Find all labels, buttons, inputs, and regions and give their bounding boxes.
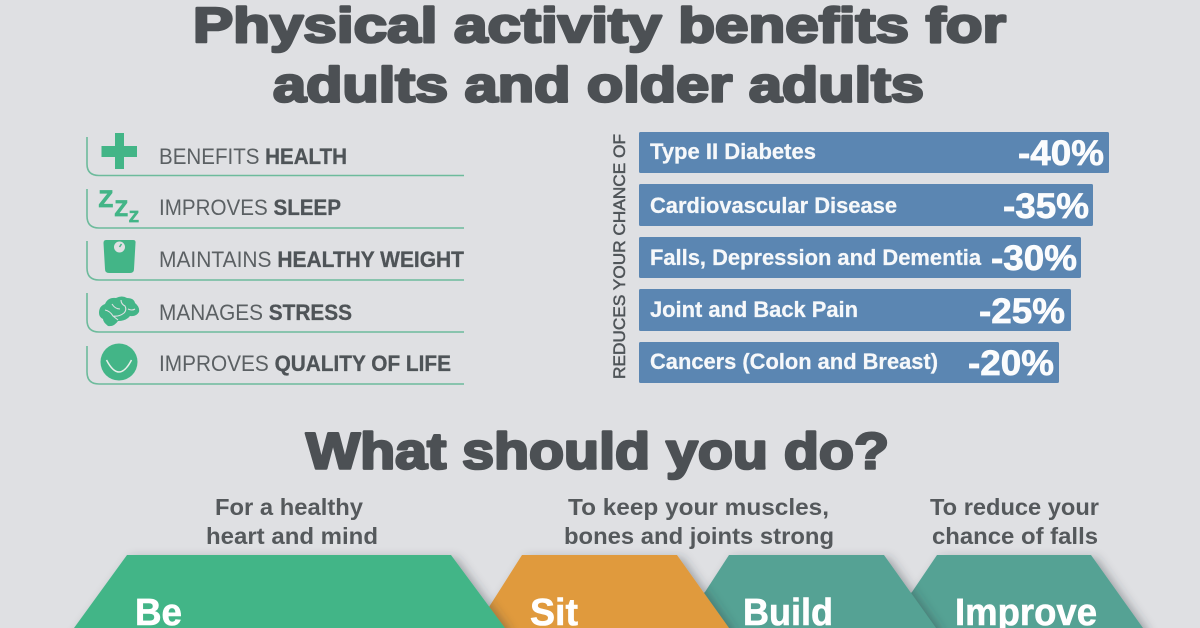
text: chance of falls: chance of falls [932, 523, 1098, 549]
icon: zzz [98, 186, 139, 226]
benefit: health [87, 133, 464, 176]
benefit: sleep [87, 186, 464, 228]
icon: zzz: Z [98, 186, 113, 213]
benefit: weight: MAINTAINS HEALTHY WEIGHT [159, 247, 465, 272]
panel: be hexagon [65, 555, 505, 628]
bar: falls, depression and dementia: -30% [991, 239, 1077, 278]
icon: brain [99, 296, 139, 326]
bar: falls, depression and dementia: Falls, Depression and Dementia [650, 245, 982, 270]
benefit: stress [87, 293, 464, 332]
bar: type II diabetes [639, 132, 1109, 173]
heading: what should you do: What should you do? [306, 422, 889, 480]
text: healthy heart and mind [206, 494, 378, 549]
panel: benefits list [87, 133, 465, 384]
title: adults and older adults [273, 58, 924, 112]
benefit: health: BENEFITS HEALTH [159, 144, 347, 169]
text: muscles, bones and joints: To keep your muscles, [568, 494, 829, 520]
text: muscles, bones and joints: bones and joints strong [564, 523, 834, 549]
benefit: quality of life [87, 344, 464, 384]
title: Physical activity benefits for [193, 0, 1006, 53]
benefit: quality of life: IMPROVES QUALITY OF LIFE [159, 351, 451, 376]
bar: type II diabetes: Type II Diabetes [650, 139, 816, 164]
text: muscles, bones and joints [564, 494, 834, 549]
bar chart: risk reduction [639, 132, 1109, 383]
icon: plus [102, 133, 137, 169]
bar: cancers: -20% [968, 344, 1054, 383]
bar: cardiovascular disease [639, 184, 1093, 226]
text: chance of falls: To reduce your [930, 494, 1099, 520]
panel: build hexagon [650, 555, 936, 628]
benefit: sleep: IMPROVES SLEEP [159, 195, 341, 220]
bar: cancers [639, 342, 1059, 383]
bar: joint and back pain: -25% [979, 292, 1065, 331]
icon: zzz: Z [114, 196, 128, 221]
icon: scale [104, 240, 136, 273]
bar: cardiovascular disease: -35% [1003, 187, 1089, 226]
icon: zzz: Z [129, 209, 139, 226]
bar: type II diabetes: -40% [1018, 134, 1104, 173]
bar: joint and back pain: Joint and Back Pain [650, 297, 858, 322]
bar: cancers: Cancers (Colon and Breast) [650, 349, 938, 374]
text: healthy heart and mind: For a healthy [215, 494, 363, 520]
benefit: stress: MANAGES STRESS [159, 300, 352, 325]
benefit: weight [87, 240, 465, 280]
icon: smile [100, 344, 138, 380]
vertical axis label: REDUCES YOUR CHANCE OF [610, 134, 629, 379]
bar: falls, depression and dementia [639, 237, 1081, 278]
bar: cardiovascular disease: Cardiovascular Disease [650, 193, 897, 218]
bar: joint and back pain [639, 289, 1071, 331]
title [193, 0, 1006, 112]
text: healthy heart and mind: heart and mind [206, 523, 378, 549]
panel: improve hexagon [860, 555, 1143, 628]
text: chance of falls [930, 494, 1099, 549]
panel: sit hexagon [430, 555, 729, 628]
